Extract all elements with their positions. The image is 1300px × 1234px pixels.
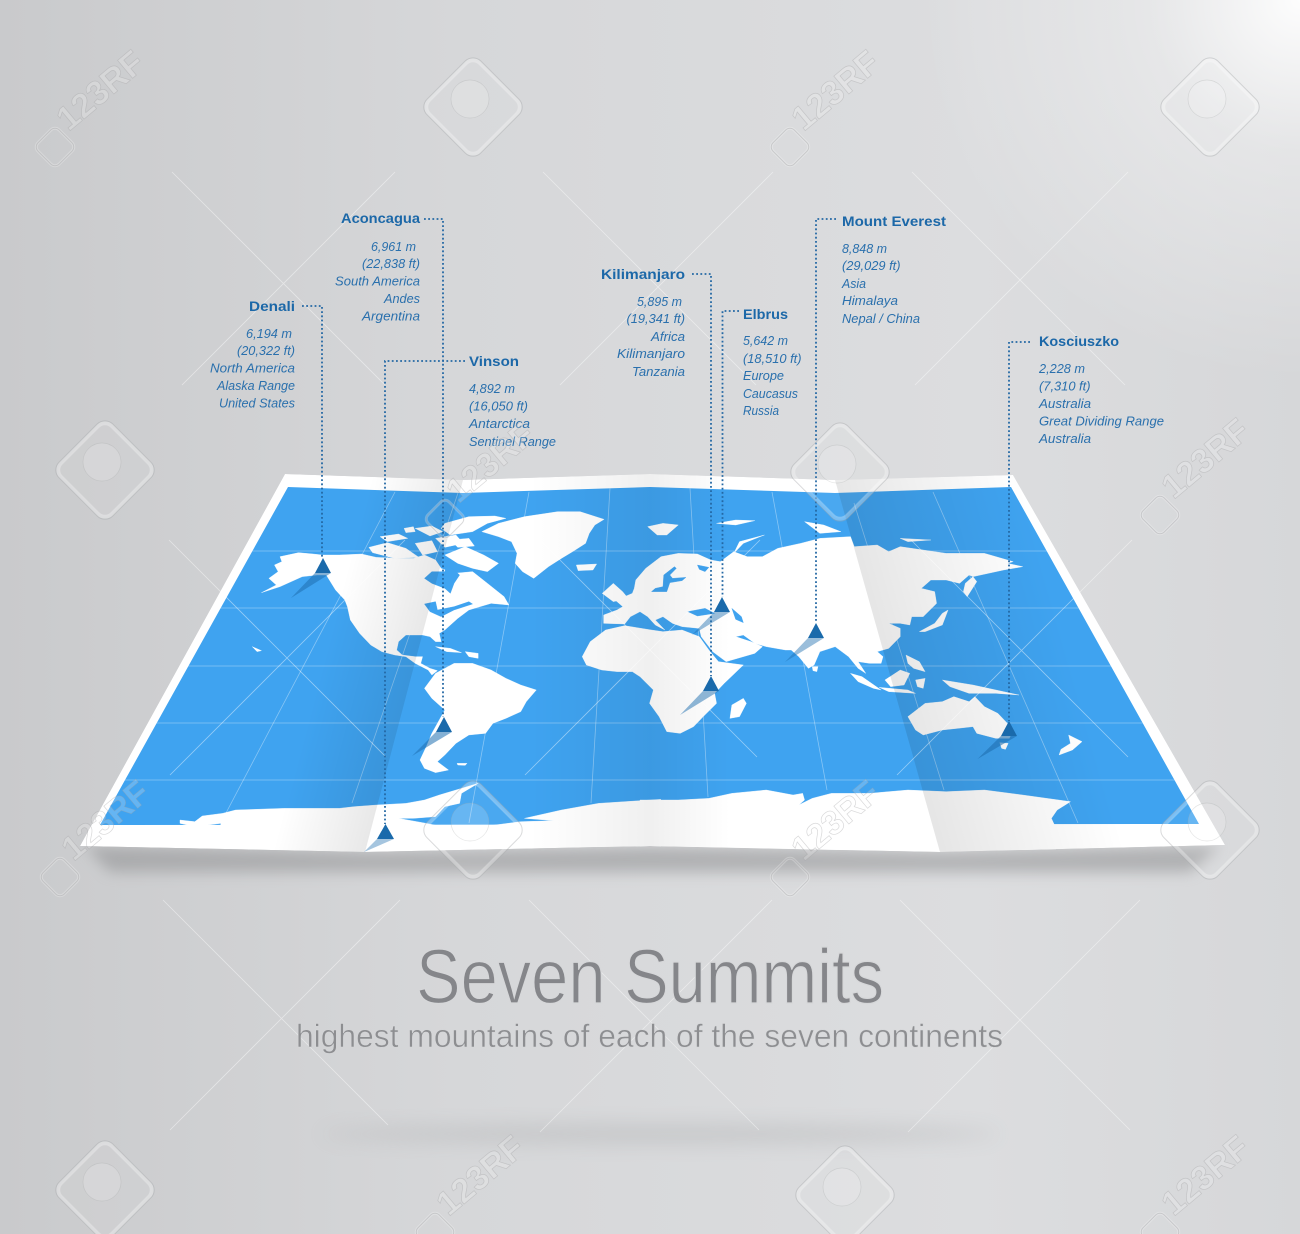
details: Antarctica xyxy=(468,416,530,431)
tasmania and new zealand xyxy=(1000,735,1082,755)
details: Alaska Range xyxy=(216,378,295,393)
antarctica west xyxy=(180,783,661,847)
watermark stamps: 123RF xyxy=(429,1128,532,1223)
callout: Mount Everest xyxy=(785,213,946,662)
watermark stamps: 123RF xyxy=(784,773,887,868)
details: Nepal / China xyxy=(842,311,920,326)
details: Caucasus xyxy=(743,386,798,401)
callout: Kosciuszko xyxy=(978,333,1164,759)
iceland and britain xyxy=(576,564,628,602)
watermark lattice lines xyxy=(163,172,1140,1132)
leader line xyxy=(816,219,836,623)
heading: Kilimanjaro xyxy=(601,266,685,282)
details: (19,341 ft) xyxy=(626,311,685,326)
graticule xyxy=(125,488,1174,823)
pin shadow xyxy=(291,573,331,598)
callout: Elbrus xyxy=(692,306,802,635)
antarctica east xyxy=(640,790,1072,850)
pin xyxy=(808,623,824,638)
africa xyxy=(582,626,743,733)
details: (18,510 ft) xyxy=(743,351,802,366)
details xyxy=(617,294,685,379)
details: (7,310 ft) xyxy=(1039,378,1090,394)
details: (29,029 ft) xyxy=(842,258,900,273)
details: 6,194 m xyxy=(246,326,292,341)
details: 5,642 m xyxy=(743,333,788,348)
details: North America xyxy=(210,360,295,376)
hudson bay xyxy=(424,570,460,594)
details: 8,848 m xyxy=(842,241,887,256)
pin shadow xyxy=(978,736,1017,759)
details xyxy=(335,239,420,324)
details: 4,892 m xyxy=(469,381,515,396)
heading: Aconcagua xyxy=(341,210,420,226)
details: 5,895 m xyxy=(637,294,682,309)
paper sheet xyxy=(80,474,1225,852)
pin shadow xyxy=(680,691,719,715)
pin xyxy=(703,676,719,691)
falklands xyxy=(457,763,467,765)
leader line xyxy=(385,361,465,824)
north america xyxy=(261,553,509,675)
details: United States xyxy=(219,396,295,410)
greenland xyxy=(482,512,604,578)
continents west xyxy=(180,512,661,847)
callout: Denali xyxy=(210,298,331,598)
details xyxy=(210,326,295,410)
details: 6,961 m xyxy=(371,239,416,254)
ground shadow xyxy=(320,1126,1000,1142)
callout: Aconcagua xyxy=(335,210,452,756)
heading: Mount Everest xyxy=(842,213,946,229)
details: Europe xyxy=(743,368,784,383)
details xyxy=(841,241,920,326)
japan and sakhalin xyxy=(919,577,977,632)
caribbean xyxy=(252,647,478,658)
pin shadow xyxy=(785,638,824,662)
watermark stamps: 123RF xyxy=(1154,1128,1257,1223)
callout: Kilimanjaro xyxy=(601,266,719,715)
details: 2,228 m xyxy=(1038,361,1085,376)
leader line xyxy=(1009,342,1030,721)
watermark stamps: 123RF xyxy=(1154,411,1257,506)
details: Great Dividing Range xyxy=(1039,414,1164,428)
pin xyxy=(377,824,394,839)
callout: Vinson xyxy=(364,353,556,852)
details: (22,838 ft) xyxy=(362,256,420,271)
leader line xyxy=(424,219,443,717)
pin shadow xyxy=(364,839,394,852)
heading: Denali xyxy=(249,298,295,314)
fold shading xyxy=(307,474,1063,852)
details: Australia xyxy=(1038,396,1091,411)
details: (16,050 ft) xyxy=(469,398,528,414)
pin xyxy=(436,717,452,732)
ocean xyxy=(100,487,1199,825)
details: Argentina xyxy=(361,308,420,324)
details: Tanzania xyxy=(632,364,685,379)
details: Himalaya xyxy=(842,293,898,308)
continents east xyxy=(582,520,1082,850)
watermark stamps: 123RF xyxy=(784,43,887,138)
pin xyxy=(315,558,331,573)
map shadow xyxy=(85,846,1220,872)
title: Seven Summits xyxy=(416,934,884,1020)
details: South America xyxy=(335,274,420,288)
details: (20,322 ft) xyxy=(237,343,295,358)
heading: Kosciuszko xyxy=(1039,333,1119,349)
arctic islands xyxy=(648,520,931,553)
australia xyxy=(908,697,1013,738)
south america xyxy=(420,663,536,773)
details: Africa xyxy=(650,329,685,344)
details: Russia xyxy=(743,403,779,418)
details: Andes xyxy=(383,291,420,306)
inland seas xyxy=(651,565,743,623)
details xyxy=(468,381,556,449)
subtitle: highest mountains of each of the seven continents xyxy=(296,1018,1003,1054)
pin shadow xyxy=(412,732,452,756)
watermark stamps: 123RF xyxy=(49,43,152,138)
leader line xyxy=(722,311,739,597)
leader line xyxy=(692,274,711,676)
details xyxy=(743,333,802,418)
heading: Vinson xyxy=(469,353,519,369)
watermark stamps: 123RF xyxy=(54,773,157,868)
pin xyxy=(714,597,730,612)
pin shadow xyxy=(692,612,730,635)
watermark stamps: 123RF xyxy=(439,415,542,510)
folded world map xyxy=(80,474,1225,852)
heading: Elbrus xyxy=(743,306,788,322)
eurasia xyxy=(604,537,1023,673)
details: Australia xyxy=(1038,431,1091,446)
details: Asia xyxy=(841,276,866,291)
great lakes xyxy=(424,602,473,617)
pin xyxy=(1001,721,1017,736)
details: Kilimanjaro xyxy=(617,346,685,361)
southeast asia islands xyxy=(812,655,1019,695)
madagascar xyxy=(730,698,746,718)
arctic islands xyxy=(369,516,506,572)
details xyxy=(1038,361,1164,446)
leader line xyxy=(302,306,322,558)
details: Sentinel Range xyxy=(469,434,556,449)
